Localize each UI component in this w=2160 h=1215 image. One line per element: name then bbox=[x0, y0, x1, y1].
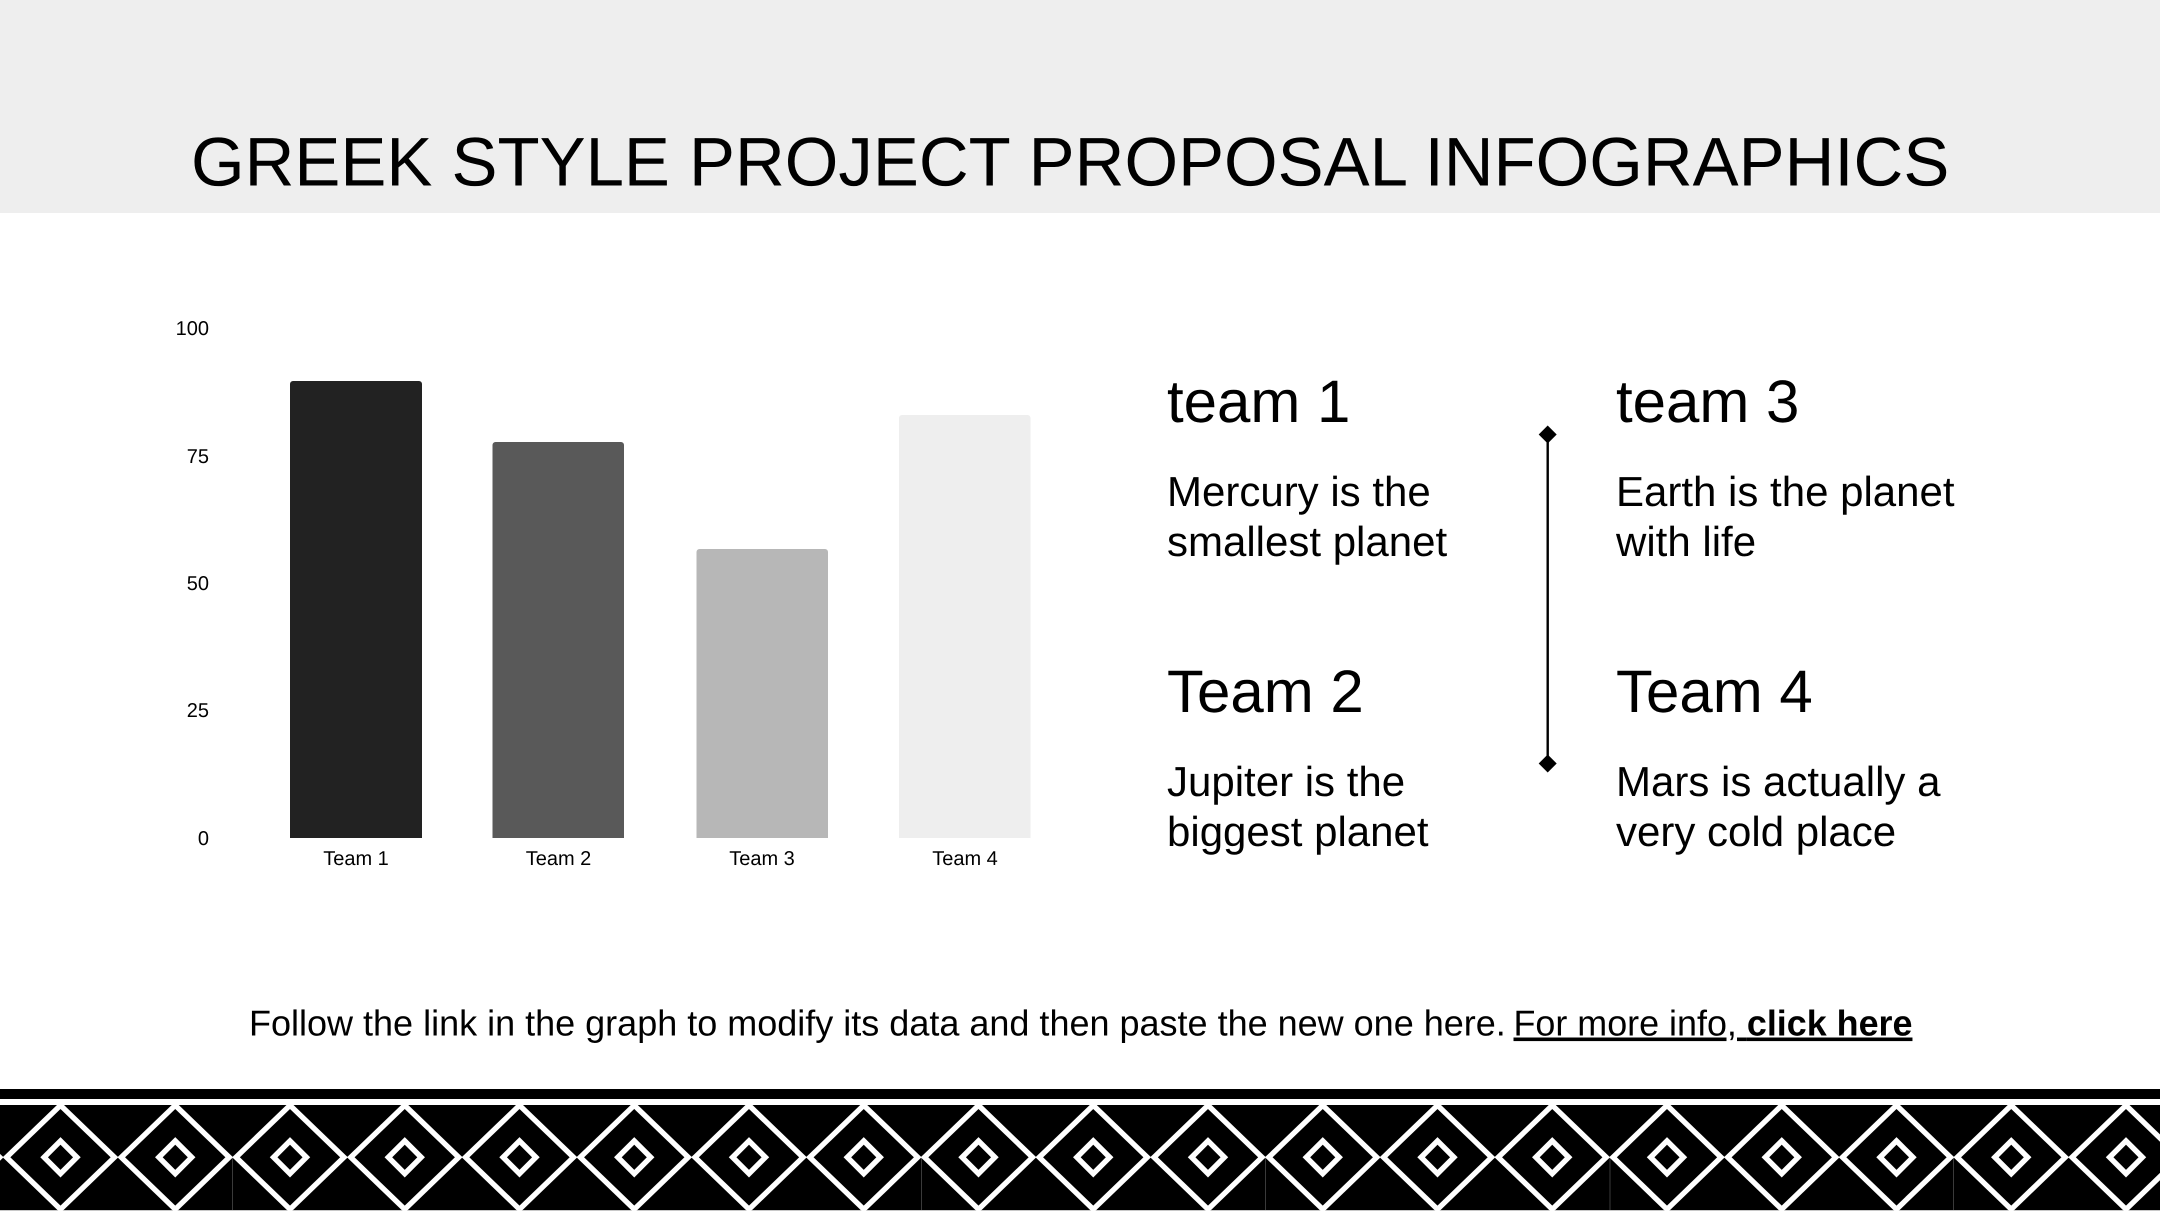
text block: team 4: Team 4 bbox=[1616, 658, 1813, 725]
footer note: Follow the link in the graph to modify its data and then paste the new one here. bbox=[249, 1002, 1506, 1044]
category labels: Team 2 bbox=[526, 848, 591, 870]
text block: team 1: smallest planet bbox=[1167, 518, 1447, 565]
text block: team 1: team 1 bbox=[1167, 368, 1350, 435]
category labels: Team 4 bbox=[932, 848, 998, 870]
bar: Team 4 bbox=[899, 415, 1030, 838]
category labels: Team 3 bbox=[729, 848, 795, 870]
bar: Team 2 bbox=[492, 442, 624, 838]
y axis labels: 25 bbox=[187, 700, 209, 722]
text block: team 1 bbox=[1167, 368, 1447, 565]
category labels bbox=[323, 848, 998, 870]
y axis labels: 50 bbox=[187, 573, 209, 595]
bar: Team 1 bbox=[290, 381, 422, 838]
text block: team 3 bbox=[1615, 368, 1955, 565]
bar: Team 3 bbox=[696, 549, 828, 838]
text block: team 2: Team 2 bbox=[1167, 658, 1364, 725]
text block: team 1: Mercury is the bbox=[1167, 468, 1431, 515]
y axis labels bbox=[176, 318, 209, 850]
title: GREEK STYLE PROJECT PROPOSAL INFOGRAPHICS bbox=[191, 124, 1949, 200]
greek pattern border bbox=[0, 1089, 2160, 1211]
bar chart bbox=[176, 318, 1030, 870]
text block: team 2: Jupiter is the bbox=[1167, 758, 1405, 805]
text block: team 2 bbox=[1167, 658, 1429, 855]
text block: team 4: Mars is actually a bbox=[1616, 758, 1941, 805]
header band bbox=[0, 0, 2160, 213]
text block: team 3: team 3 bbox=[1616, 368, 1799, 435]
y axis labels: 0 bbox=[198, 828, 209, 850]
divider with diamond ends bbox=[1539, 426, 1557, 772]
text block: team 4 bbox=[1616, 658, 1941, 855]
text block: team 3: with life bbox=[1615, 518, 1756, 565]
text block: team 3: Earth is the planet bbox=[1616, 468, 1955, 515]
footer note: For more info, click here bbox=[1514, 1004, 1912, 1044]
text block: team 2: biggest planet bbox=[1167, 808, 1429, 855]
category labels: Team 1 bbox=[323, 848, 389, 870]
y axis labels: 75 bbox=[187, 446, 209, 468]
y axis labels: 100 bbox=[176, 318, 209, 340]
text block: team 4: very cold place bbox=[1616, 808, 1896, 855]
